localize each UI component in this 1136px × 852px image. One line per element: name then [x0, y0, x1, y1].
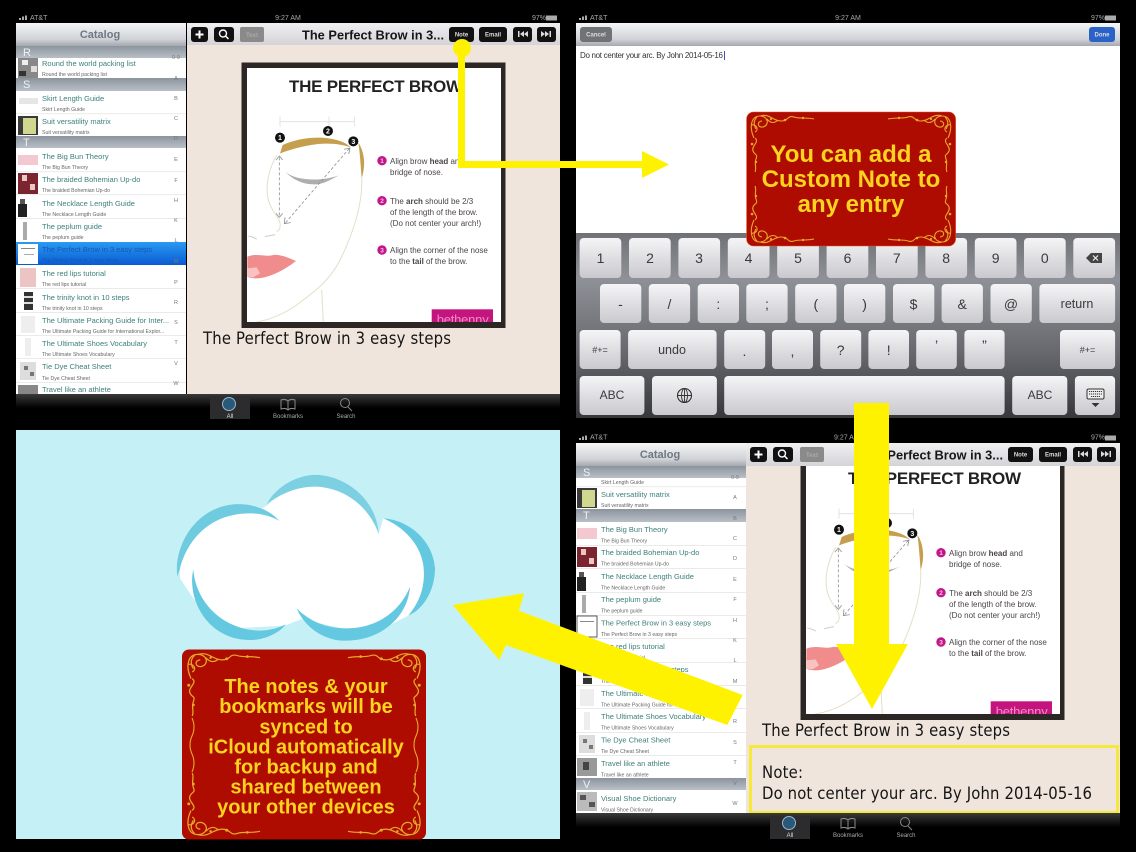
status bar: 97%: [1091, 434, 1105, 442]
cloud body: [180, 487, 424, 635]
keyboard row 2: (: [813, 296, 818, 312]
sidebar: catalog list: [16, 23, 186, 394]
callout text: your other devices: [217, 796, 395, 818]
callout text: any entry: [798, 191, 905, 218]
step list: bridge of nose.: [390, 168, 443, 177]
cloud outline crescents: [177, 475, 435, 641]
keyboard row 1: 5: [794, 250, 802, 266]
bethenny logo: bethenny: [437, 312, 489, 327]
section R: R: [23, 47, 31, 59]
status bar: AT&T: [590, 15, 608, 22]
keyboard row 3: #+=: [1080, 345, 1095, 355]
keyboard row 3: .: [743, 343, 746, 359]
row: red lips: The red lips tutorial: [601, 656, 645, 662]
main content area: [746, 443, 1120, 813]
section T: T: [23, 137, 30, 149]
step list: (Do not center your arch!): [949, 611, 1040, 620]
callout text: The notes & your: [224, 676, 388, 698]
callout text: shared between: [230, 776, 382, 798]
keyboard row 3: ”: [982, 337, 987, 353]
tab: search: [896, 818, 916, 839]
brow diagram: [800, 454, 1064, 720]
tab: bookmarks: [833, 818, 863, 839]
step list: Align brow head and: [390, 157, 464, 166]
index letters: D: [733, 556, 737, 562]
toolbar: [746, 443, 1120, 466]
tab bar: [16, 394, 560, 420]
row: necklace: [576, 572, 746, 593]
row: big bun: [576, 525, 746, 546]
toolbar title: The Perfect Brow in 3...: [302, 28, 444, 42]
status bar: 97%: [1091, 15, 1105, 22]
row: big bun: [16, 152, 186, 172]
row: travel: [577, 758, 670, 778]
keyboard row 2: return: [1061, 297, 1093, 311]
row: big bun: The Big Bun Theory: [601, 525, 668, 534]
sidebar header: Catalog: [80, 29, 120, 41]
step list: to the tail of the brow.: [949, 649, 1026, 658]
step list: 1: [380, 158, 384, 165]
arrow: editor down to saved note: [836, 403, 908, 709]
step list: 2: [380, 198, 384, 205]
cancel button: [580, 27, 612, 42]
face illustration: 3: [351, 139, 355, 146]
text button: [800, 447, 824, 462]
section V: V: [583, 779, 591, 791]
row: round the world: Round the world packing list: [42, 59, 137, 68]
step list: The arch should be 2/3: [390, 197, 474, 206]
index letters: V: [174, 361, 178, 367]
brow diagram: THE PERFECT BROW: [289, 77, 463, 96]
sidebar header: [576, 443, 746, 466]
row: suit versatility: [577, 488, 670, 509]
keyboard row 4: ABC: [600, 388, 625, 402]
row: ultimate packing: The Ultimate Packing Guide for International Explor...: [42, 329, 164, 335]
row: ultimate shoes: [16, 338, 186, 359]
row: tie dye: Tie Dye Cheat Sheet: [42, 376, 91, 382]
step list: [936, 548, 1047, 658]
row: visual shoe dictionary: [577, 792, 677, 814]
row: red lips: The red lips tutorial: [601, 642, 665, 651]
index letters: M: [733, 679, 738, 685]
callout text: Custom Note to: [762, 166, 940, 193]
keyboard row 1: 1: [597, 250, 605, 266]
row: necklace: The Necklace Length Guide: [601, 572, 694, 581]
index letters: K: [733, 638, 737, 644]
step list: Align brow head and: [949, 549, 1023, 558]
index letters: W: [732, 801, 738, 807]
tab bar: [576, 813, 1120, 839]
status bar: 9:27 AM: [834, 434, 860, 442]
row: tie dye: [16, 362, 186, 383]
keyboard row 3: undo: [658, 343, 686, 357]
index letters: T: [174, 340, 178, 346]
row: ultimate shoes: [576, 712, 746, 733]
step list: 3: [939, 639, 943, 646]
section R: [16, 46, 186, 59]
index letters: M: [174, 259, 179, 265]
row: big bun: The Big Bun Theory: [42, 152, 109, 161]
row: red lips: The red lips tutorial: [42, 282, 86, 288]
row: big bun: The Big Bun Theory: [42, 165, 88, 171]
done button: Done: [1094, 32, 1110, 38]
panel: catalog screen showing saved note: [576, 434, 1120, 839]
keyboard row 3: ?: [837, 342, 845, 358]
index letters: S: [174, 320, 178, 326]
cancel button: Cancel: [586, 32, 606, 38]
next button: [1097, 447, 1116, 462]
index letters: L: [733, 658, 737, 664]
row: travel: Travel like an athlete: [601, 772, 649, 778]
row: skirt length: [16, 94, 186, 114]
row: trinity knot: The trinity knot in 10 steps: [601, 665, 689, 674]
row: suit versatility: Suit versatility matrix: [601, 490, 670, 499]
section S: S: [583, 467, 590, 479]
callout text: bookmarks will be: [219, 696, 393, 718]
ornate border: [187, 654, 421, 835]
tab: bookmarks: Bookmarks: [273, 414, 303, 420]
face illustration: 1: [278, 135, 282, 142]
bethenny logo: [432, 309, 493, 322]
index letters: 0-9: [731, 475, 739, 481]
note button: [449, 27, 474, 42]
note toolbar: [576, 23, 1120, 46]
index letters: T: [733, 760, 737, 766]
index letters: D: [174, 136, 178, 142]
step list: of the length of the brow.: [390, 208, 478, 217]
tab: all: All: [227, 414, 233, 420]
index letters: H: [733, 618, 737, 624]
tab: all: [222, 398, 236, 420]
row: braided: [16, 173, 186, 195]
callout text: iCloud automatically: [208, 736, 405, 758]
email button: Email: [485, 32, 501, 38]
step list: to the tail of the brow.: [390, 257, 467, 266]
index letters: V: [733, 781, 737, 787]
search button: [773, 447, 793, 462]
index letters: B: [733, 516, 737, 522]
index letters: R: [733, 719, 737, 725]
index letters: F: [733, 597, 737, 603]
index letters: 0-9: [172, 55, 180, 61]
row: selected entry: The Perfect Brow in 3 easy steps: [42, 258, 119, 264]
row: travel: Travel like an athlete: [601, 759, 670, 768]
step list: bridge of nose.: [949, 560, 1002, 569]
keyboard row 3: ,: [791, 343, 794, 359]
saved note box: Do not center your arc. By John 2014-05-16: [762, 784, 1092, 803]
row: round the world: [18, 58, 137, 78]
ornate border: [751, 115, 951, 243]
step list: 2: [939, 590, 943, 597]
main content area: [187, 23, 560, 394]
saved note box: Note:: [762, 763, 803, 782]
index letters: H: [174, 198, 178, 204]
text button: [240, 27, 264, 42]
row: ultimate shoes: The Ultimate Shoes Vocabulary: [601, 712, 706, 721]
keyboard row 1: 3: [695, 250, 703, 266]
row: braided: The braided Bohemian Up-do: [601, 562, 669, 568]
row: ultimate shoes: The Ultimate Shoes Vocabulary: [42, 339, 147, 348]
row: braided: [576, 547, 746, 569]
keyboard row 1: 0: [1041, 250, 1049, 266]
icon: cloud: [177, 475, 435, 641]
status bar: [579, 15, 1116, 22]
keyboard row 2: [600, 284, 1115, 323]
keyboard row 2: ;: [765, 296, 769, 312]
row: trinity knot: The trinity knot in 10 steps: [42, 306, 103, 312]
add button: [191, 27, 208, 42]
section V: [576, 778, 746, 791]
keyboard row 1: [580, 238, 1115, 278]
index letters: F: [174, 178, 178, 184]
row: necklace: The Necklace Length Guide: [42, 212, 106, 218]
section T: T: [583, 510, 590, 522]
row: trinity knot: The trinity knot in 10 steps: [42, 293, 130, 302]
note button: [1008, 447, 1033, 462]
index letters: W: [173, 381, 179, 387]
row: skirt length: Skirt Length Guide: [42, 94, 104, 103]
row: trinity knot: The trinity knot in 10 steps: [601, 679, 662, 685]
row: skirt sub-line: Skirt Length Guide: [601, 480, 644, 486]
keyboard row 2: /: [668, 296, 672, 312]
tab: all: All: [787, 833, 793, 839]
face illustration: 3: [910, 531, 914, 538]
row: braided: The braided Bohemian Up-do: [42, 188, 110, 194]
row: visual shoe dictionary: Visual Shoe Dictionary: [601, 794, 677, 803]
done button: [1089, 27, 1115, 42]
row: peplum: The peplum guide: [42, 235, 84, 241]
row: visual shoe dictionary: Visual Shoe Dictionary: [601, 808, 654, 814]
keyboard row 4: ABC: [1028, 388, 1053, 402]
keyboard row 2: :: [716, 296, 720, 312]
row: braided: The braided Bohemian Up-do: [601, 548, 699, 557]
row: trinity knot: [576, 665, 746, 686]
email button: [1039, 447, 1067, 462]
keyboard row 4: [580, 376, 1115, 415]
index letters: E: [174, 157, 178, 163]
panel: iCloud sync: [16, 430, 560, 840]
bethenny logo: [990, 701, 1052, 714]
add button: [750, 447, 767, 462]
row: braided: The braided Bohemian Up-do: [42, 175, 140, 184]
keyboard row 2: ): [862, 296, 867, 312]
row: suit versatility: Suit versatility matrix: [601, 503, 649, 509]
status bar: AT&T: [30, 15, 48, 22]
callout text: You can add a: [771, 141, 932, 168]
status bar: 9:27 AM: [275, 15, 301, 22]
row: ultimate packing: [16, 316, 186, 336]
row: tie dye: [576, 735, 746, 756]
callout text: [762, 141, 940, 218]
row: ultimate packing: The Ultimate Packing Guide for Inter...: [601, 689, 728, 698]
row: travel: Travel like an athlete: [42, 385, 111, 394]
row: perfect brow: The Perfect Brow in 3 easy steps: [601, 632, 678, 638]
tab: bookmarks: [273, 399, 303, 420]
row: selected entry: The Perfect Brow in 3 easy steps: [42, 245, 152, 254]
step list: Align the corner of the nose: [949, 638, 1047, 647]
row: tie dye: Tie Dye Cheat Sheet: [601, 749, 650, 755]
step list: Align the corner of the nose: [390, 246, 488, 255]
step list: (Do not center your arch!): [390, 219, 481, 228]
status bar: 9:27 AM: [835, 15, 861, 22]
keyboard row 1: 8: [942, 250, 950, 266]
keyboard row 2: $: [910, 296, 918, 312]
index letters: E: [733, 577, 737, 583]
brow diagram: [242, 62, 506, 328]
callout text: for backup and: [234, 756, 378, 778]
on-screen keyboard: [576, 233, 1120, 418]
keyboard row 3: #+=: [592, 345, 608, 355]
toolbar: [187, 23, 560, 45]
row: suit versatility: Suit versatility matrix: [42, 130, 90, 136]
index letters: S: [733, 740, 737, 746]
note editing area: [576, 46, 1120, 233]
caption: The Perfect Brow in 3 easy steps: [761, 721, 1010, 740]
arrow: note button to editor: [453, 39, 669, 178]
step list: of the length of the brow.: [949, 600, 1037, 609]
row: ultimate packing: The Ultimate Packing Guide for International Explor...: [601, 702, 723, 708]
index letters: A: [174, 76, 178, 82]
row: perfect brow: [576, 616, 746, 639]
step list: The arch should be 2/3: [949, 589, 1033, 598]
section T: [576, 509, 746, 522]
row: big bun: The Big Bun Theory: [601, 538, 647, 544]
tab: all: [782, 816, 796, 839]
previous button: [513, 27, 532, 42]
index letters: C: [733, 536, 737, 542]
keyboard row 2: &: [958, 296, 968, 312]
keyboard row 3: ’: [935, 337, 938, 353]
next button: [537, 27, 556, 42]
panel: note editor with keyboard: [576, 15, 1120, 418]
row: tie dye: Tie Dye Cheat Sheet: [601, 736, 671, 744]
face illustration: [806, 509, 923, 715]
face illustration: [247, 117, 364, 323]
index letters: L: [174, 238, 178, 244]
tab: search: Search: [896, 833, 916, 839]
keyboard row 1: 7: [893, 250, 901, 266]
callout: sync note: [182, 650, 426, 840]
text button: Text: [246, 33, 258, 39]
row: skirt length: Skirt Length Guide: [42, 107, 85, 113]
email button: [479, 27, 507, 42]
note editing area: Do not center your arc. By John 2014-05-16: [580, 51, 724, 60]
step list: [377, 156, 488, 266]
keyboard row 1: 2: [646, 250, 654, 266]
face illustration: 2: [885, 520, 889, 528]
index letters: P: [733, 699, 737, 705]
row: ultimate shoes: The Ultimate Shoes Vocabulary: [42, 352, 115, 358]
keyboard row 3: !: [887, 342, 891, 358]
row: tie dye: Tie Dye Cheat Sheet: [42, 362, 112, 371]
row: trinity knot: [16, 292, 186, 313]
row: necklace: The Necklace Length Guide: [601, 586, 665, 592]
panel: catalog screen with selected entry: [16, 15, 560, 420]
tab: bookmarks: Bookmarks: [833, 833, 863, 839]
search button: [214, 27, 234, 42]
keyboard row 1: 9: [992, 250, 1000, 266]
sidebar: catalog list: [576, 443, 746, 814]
section S: S: [23, 79, 30, 91]
face illustration: 1: [837, 527, 841, 534]
bethenny logo: bethenny: [996, 704, 1048, 719]
index letters: C: [174, 116, 178, 122]
keyboard row 1: 6: [844, 250, 852, 266]
status bar: AT&T: [590, 434, 608, 442]
row: peplum: The peplum guide: [601, 608, 643, 614]
row: ultimate shoes: The Ultimate Shoes Vocabulary: [601, 726, 674, 732]
row: suit versatility: [18, 116, 111, 136]
row: selected entry: [16, 242, 186, 265]
section T: [16, 136, 186, 149]
status bar: [19, 15, 557, 22]
sidebar header: Catalog: [640, 449, 680, 461]
index letters: [172, 55, 180, 387]
row: red lips: [576, 642, 746, 663]
index letters: B: [174, 96, 178, 102]
step list: 3: [380, 247, 384, 254]
index letters: [731, 475, 739, 807]
index letters: R: [174, 300, 178, 306]
row: peplum: [23, 222, 102, 241]
row: round the world: Round the world packing list: [42, 72, 107, 78]
row: necklace: The Necklace Length Guide: [42, 199, 135, 208]
row: perfect brow: The Perfect Brow in 3 easy steps: [601, 618, 711, 628]
callout text: synced to: [259, 716, 353, 738]
sidebar header: [16, 23, 186, 46]
saved note box: [750, 746, 1118, 812]
callout text: [208, 676, 405, 818]
index letters: A: [733, 495, 737, 501]
row: peplum: The peplum guide: [42, 222, 102, 231]
face illustration: 2: [326, 128, 330, 136]
toolbar title: The Perfect Brow in 3...: [861, 448, 1003, 462]
row: ultimate packing: The Ultimate Packing Guide for Inter...: [42, 316, 169, 325]
row: ultimate packing: [576, 689, 746, 709]
keyboard row 2: @: [1004, 296, 1018, 312]
note button: Note: [455, 32, 469, 38]
note button: Note: [1014, 452, 1028, 458]
keyboard row 1: 4: [745, 250, 753, 266]
arrow: saved note to iCloud: [453, 593, 743, 725]
section S: [576, 466, 746, 479]
previous button: [1073, 447, 1092, 462]
step list: 1: [939, 550, 943, 557]
row: peplum: The peplum guide: [601, 595, 661, 604]
text button: Text: [806, 453, 818, 459]
tab: search: Search: [336, 414, 356, 420]
row: suit versatility: Suit versatility matrix: [42, 117, 111, 126]
row: necklace: [16, 199, 186, 219]
row: red lips: The red lips tutorial: [42, 269, 106, 278]
status bar: 97%: [532, 15, 546, 22]
tab: search: [336, 398, 356, 420]
index letters: P: [174, 280, 178, 286]
status bar: [579, 434, 1116, 442]
index letters: K: [174, 218, 178, 224]
email button: Email: [1045, 452, 1061, 458]
callout: custom note: [747, 112, 956, 246]
section S: [16, 78, 186, 91]
row: red lips: [16, 268, 186, 289]
row: peplum: [576, 595, 746, 616]
keyboard row 3: [580, 330, 1115, 369]
keyboard row 2: -: [618, 296, 623, 312]
caption: The Perfect Brow in 3 easy steps: [202, 329, 451, 348]
brow diagram: THE PERFECT BROW: [848, 469, 1022, 488]
